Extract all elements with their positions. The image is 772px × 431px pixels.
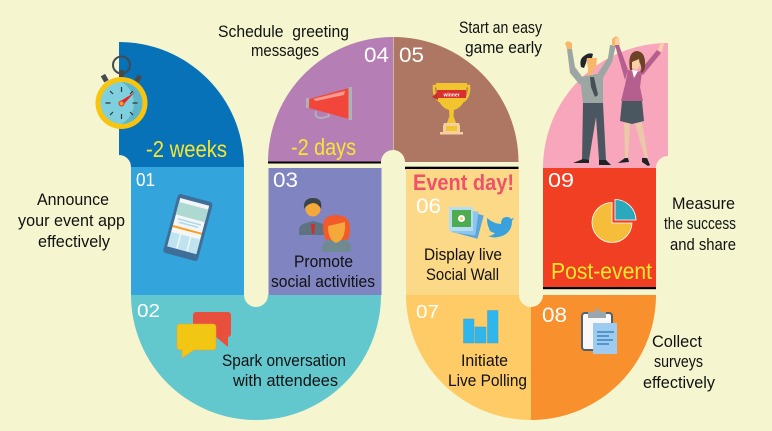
panel: step 09 post-event [543,43,668,289]
icon: two people [299,198,351,252]
panel: step 09 post-event: 09 [548,170,574,192]
text: announce: your event app [18,212,125,230]
panel: step 03: Promote [294,253,353,271]
panel: step 08 [531,295,656,420]
text: start an easy game early: Start an easy [459,19,543,37]
panel: step 06: Social Wall [426,266,499,284]
panel: step 04 [268,37,393,164]
text: measure the success: the success [664,215,736,233]
panel: step 04: 04 [364,44,389,67]
text: collect surveys: effectively [643,374,716,392]
panel: step 02: 02 [137,301,160,321]
text: measure the success [664,195,736,254]
icon: celebrating man [565,36,619,165]
panel: step 01: 01 [136,170,155,190]
icon: celebrating woman [615,37,664,166]
text: measure the success: Measure [672,195,735,213]
panel: step 02: with attendees [232,372,338,390]
panel: step 05: 05 [399,44,424,67]
icon: stopwatch [96,56,148,129]
panel: step 02: Spark onversation [222,352,346,370]
panel: step 03 [268,168,382,295]
text: collect surveys: surveys [654,353,703,371]
panel: step 04: -2 days [291,134,356,160]
icon: clipboard [582,308,617,354]
text: start an easy game early: game early [465,39,543,57]
panel: step 07: 07 [416,302,439,322]
panel: step 01 [131,167,244,295]
icon: megaphone [306,87,352,120]
panel: -2 weeks quarter: -2 weeks [146,136,227,162]
text: announce: Announce [37,191,109,209]
text: start an easy game early [459,19,543,57]
icon: tablet [163,193,213,262]
panel: step 06: Display live [424,246,502,264]
icon: bar chart [464,310,498,343]
panel: step 02 [131,295,381,420]
panel: step 07: Initiate [461,352,508,370]
icon: twitter bird [487,217,514,238]
panel: step 08: 08 [542,304,567,327]
panel: step 06: 06 [416,195,441,218]
panel: step 09 post-event: Post-event [551,258,653,284]
icon: photo stack [449,207,484,239]
panel: -2 weeks quarter [119,42,244,167]
panel: step 06: Event day! [413,170,514,195]
text: measure the success: and share [670,236,736,254]
panel: step 05 [394,37,518,169]
panel: step 07 [406,295,531,420]
panel: step 03: 03 [273,169,298,192]
text: announce: effectively [38,233,111,251]
text: collect surveys [643,333,716,392]
text: collect surveys: Collect [652,333,702,351]
icon: trophy: winner [442,92,460,98]
icon: pie chart [592,200,636,242]
icon: chat bubbles [177,312,231,358]
panel: step 06 [406,169,519,295]
text: schedule greeting messages: Schedule greeting [218,23,349,41]
text: schedule greeting messages [218,23,349,60]
text: schedule greeting messages: messages [251,42,319,60]
panel: step 07: Live Polling [448,372,527,390]
text: announce [18,191,125,251]
panel: step 03: social activities [271,273,375,291]
